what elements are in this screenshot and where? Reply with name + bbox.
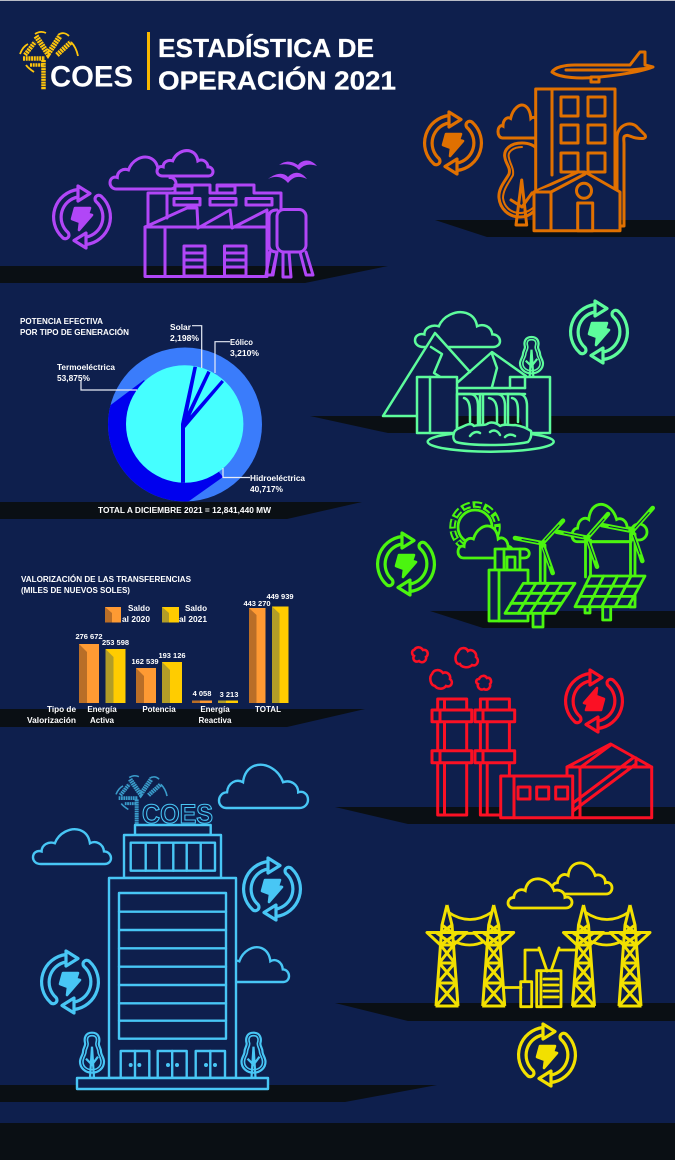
clouds bbox=[110, 151, 213, 189]
stems bbox=[533, 597, 635, 627]
pie labels: 53,875% bbox=[57, 374, 90, 383]
building tower bbox=[109, 825, 236, 1078]
solar panel right bbox=[575, 576, 645, 607]
title: ESTADÍSTICA DE bbox=[158, 33, 374, 63]
bar values: 276 672 bbox=[75, 632, 103, 641]
bar chart axis labels: Activa bbox=[90, 716, 115, 725]
pie leader lines bbox=[81, 326, 250, 478]
pie labels: Eólico bbox=[230, 338, 253, 347]
pond bbox=[428, 423, 554, 452]
cloud bbox=[498, 105, 543, 138]
scene: mint hydroelectric dam bbox=[383, 312, 554, 452]
bar chart axis labels: Valorización bbox=[27, 716, 76, 725]
icon: blue refresh left bbox=[42, 951, 98, 1013]
pie heading: POTENCIA EFECTIVA bbox=[20, 317, 103, 326]
bar values: 193 126 bbox=[158, 651, 186, 660]
door handles bbox=[129, 1063, 217, 1067]
bar chart bbox=[75, 592, 294, 703]
plinth bbox=[77, 1078, 268, 1089]
solar building bbox=[489, 549, 529, 621]
pie chart bbox=[108, 348, 262, 502]
bar chart legend: al 2021 bbox=[179, 615, 208, 624]
chimney right bbox=[475, 699, 515, 815]
smoke puffs bbox=[412, 647, 491, 690]
pie labels bbox=[57, 323, 306, 494]
bar chart legend: Saldo bbox=[185, 604, 207, 613]
logo COES bbox=[20, 32, 133, 94]
bar chart heading: VALORIZACIÓN DE LAS TRANSFERENCIAS bbox=[21, 575, 192, 584]
tree bbox=[499, 143, 538, 225]
scene: yellow transmission towers bbox=[427, 863, 650, 1007]
plant hall bbox=[567, 744, 652, 818]
pie labels: Solar bbox=[170, 323, 191, 332]
icon: purple refresh bbox=[54, 186, 110, 248]
bars: total bbox=[249, 606, 288, 703]
building logo palm bbox=[116, 776, 167, 825]
bar chart axis labels: Reactiva bbox=[199, 716, 232, 725]
pie labels: Hidroeléctrica bbox=[250, 474, 306, 483]
bar values: 3 213 bbox=[220, 690, 238, 699]
substation bbox=[504, 948, 576, 1007]
cloud bbox=[458, 526, 513, 558]
bars: energía reactiva bbox=[192, 700, 238, 703]
bar values: 449 939 bbox=[266, 592, 294, 601]
bar chart axis labels bbox=[27, 705, 281, 725]
icon: orange refresh bbox=[425, 112, 481, 174]
towers bbox=[427, 905, 650, 1006]
lamp bbox=[617, 124, 645, 226]
bars: potencia bbox=[136, 662, 182, 703]
bar values bbox=[75, 592, 294, 699]
clouds bbox=[508, 863, 612, 908]
bar chart legend: al 2020 bbox=[122, 615, 151, 624]
scene: orange building and house bbox=[498, 52, 653, 231]
bar chart axis labels: Potencia bbox=[142, 705, 176, 714]
icon: yellow refresh bbox=[519, 1024, 575, 1086]
mountains bbox=[383, 333, 526, 416]
wires bbox=[448, 912, 629, 945]
bar chart axis labels: TOTAL bbox=[255, 705, 281, 714]
cloud bbox=[415, 312, 500, 347]
trees bbox=[80, 1033, 266, 1078]
plant annex bbox=[501, 776, 573, 818]
bar chart heading bbox=[21, 575, 192, 595]
scene: purple factory bbox=[110, 151, 317, 277]
second cloud bbox=[572, 504, 647, 542]
tower bbox=[536, 89, 615, 191]
bars: energía activa bbox=[79, 644, 126, 703]
bar values: 443 270 bbox=[243, 599, 271, 608]
chimney left bbox=[432, 699, 472, 815]
logo COES: COES bbox=[50, 60, 133, 94]
bar chart heading: (MILES DE NUEVOS SOLES) bbox=[21, 586, 130, 595]
icon: blue refresh right bbox=[244, 858, 300, 920]
building logo word: COES bbox=[142, 799, 213, 829]
pie labels: Termoeléctrica bbox=[57, 363, 116, 372]
logo divider bbox=[147, 32, 150, 90]
house bbox=[534, 172, 620, 231]
pie labels: 2,198% bbox=[170, 334, 199, 343]
pie heading bbox=[20, 317, 129, 337]
bar values: 162 539 bbox=[131, 657, 159, 666]
factory building bbox=[145, 185, 313, 277]
bar chart legend bbox=[105, 604, 208, 624]
waterfalls bbox=[458, 394, 527, 428]
bar chart axis labels: Energía bbox=[87, 705, 117, 714]
wind turbines bbox=[515, 508, 653, 600]
pie labels: 40,717% bbox=[250, 485, 283, 494]
tree bbox=[520, 337, 543, 378]
airplane bbox=[552, 52, 653, 82]
icon: red refresh bbox=[566, 670, 622, 732]
icon: green refresh bbox=[378, 533, 434, 595]
bar values: 4 058 bbox=[193, 689, 211, 698]
scene: green solar and wind farm bbox=[452, 504, 653, 627]
clouds bbox=[33, 765, 308, 982]
scene: red thermal plant bbox=[412, 647, 652, 818]
solar panel left bbox=[505, 583, 575, 613]
title: OPERACIÓN 2021 bbox=[158, 66, 396, 96]
bar chart axis labels: Energía bbox=[200, 705, 230, 714]
title bbox=[158, 33, 396, 96]
pie labels: 3,210% bbox=[230, 349, 259, 358]
pie heading: POR TIPO DE GENERACIÓN bbox=[20, 328, 129, 337]
bar chart legend: Saldo bbox=[128, 604, 150, 613]
doors bbox=[121, 1051, 225, 1078]
bar values: 253 598 bbox=[102, 638, 129, 647]
icon: mint refresh bbox=[571, 301, 627, 363]
pie total: TOTAL A DICIEMBRE 2021 = 12,841,440 MW bbox=[98, 506, 271, 515]
sun bbox=[452, 504, 498, 550]
bar chart axis labels: Tipo de bbox=[47, 705, 77, 714]
birds bbox=[268, 161, 317, 183]
scene: blue COES building bbox=[33, 765, 308, 1089]
dam bbox=[417, 377, 550, 433]
